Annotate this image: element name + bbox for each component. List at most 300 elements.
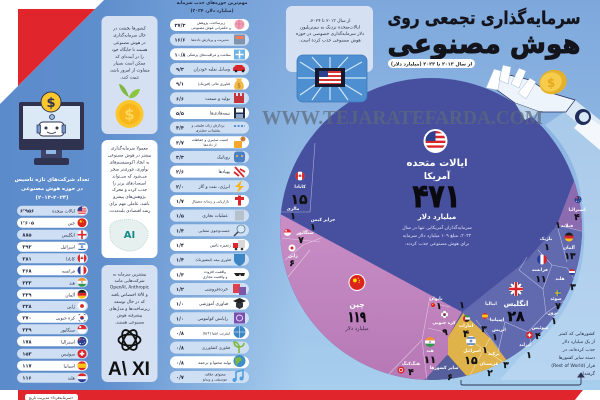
chart: voronoi investment by country — [270, 70, 600, 390]
text block: card three copy: OpenAI, Anthropic — [110, 284, 150, 290]
panel: country company counts — [17, 206, 88, 383]
arrow: rest of world bracket — [461, 373, 584, 385]
cell: Austria: اتریش — [492, 328, 506, 333]
text block: US investment note card: هوش مصنوعی جذب کرده است. — [299, 38, 361, 44]
row: cybersecurity: ۳/۷ — [176, 140, 184, 146]
row: energy oil and gas — [170, 180, 249, 193]
cell: France: فرانسه — [532, 268, 548, 273]
row: natural language processing: پشتیبانی مشتری — [196, 128, 220, 132]
cell: Singapore — [284, 229, 314, 246]
cell: Norway — [547, 311, 558, 327]
row: infrastructure and governance: زیرساخت، پژوهش — [197, 21, 225, 25]
row: United States: ۶٬۹۵۶ — [20, 209, 34, 215]
row: data management: ۱۶/۶ — [175, 38, 185, 44]
callout: United States: ۲۰۲۴، مبلغ ۱۰۹ میلیارد دلار سرمایه — [403, 233, 472, 239]
cell: Malaysia: ۱ — [290, 212, 296, 222]
callout: China — [344, 274, 369, 332]
subtitle pill: از سال ۲۰۱۳ تا ۲۰۲۴ (میلیارد دلار) — [391, 62, 472, 68]
cell: Germany: ۱۳ — [564, 252, 576, 262]
row: marketing and digital media — [170, 195, 249, 207]
region: Oceania — [557, 181, 582, 232]
row: retail: ۱/۲ — [176, 287, 184, 293]
heading: new company count — [15, 176, 89, 201]
row: quantum computing — [170, 312, 249, 324]
row: supply chain: زنجیره تامین — [210, 242, 231, 248]
cell: Cayman Islands: ۱ — [310, 223, 316, 233]
cell: Ireland: ۱ — [526, 351, 532, 361]
cell: Spain: اسپانیا — [490, 318, 505, 323]
icon: OpenAI knot logo — [118, 328, 140, 352]
row: Singapore: ۲۳۹ — [22, 327, 32, 333]
row: semantic search — [170, 224, 249, 236]
row: natural language processing: پردازش زبان طبیعی و — [190, 124, 225, 128]
row: semiconductors: نیمه‌هادی‌ها — [210, 112, 230, 116]
row: England: ۸۸۵ — [22, 233, 32, 239]
icon: robot hand holding coin — [486, 65, 600, 150]
text block: card one copy: را در آینده‌ای که — [115, 54, 144, 60]
callout: rest of world note: (Rest of World) قرار — [551, 363, 595, 369]
row: fintech — [170, 78, 249, 90]
row: Israel: اسرائیل — [61, 246, 75, 251]
cell: South Korea — [432, 311, 456, 338]
row: Australia: استرالیا — [61, 340, 75, 345]
callout: rest of world note — [551, 331, 596, 377]
cell: Netherlands: هلند — [555, 277, 565, 282]
callout: rest of world note: جذب کرده‌اند، در — [562, 347, 595, 353]
row: agritech: فناوری کشاورزی — [202, 345, 230, 350]
row: quantum computing: ۱/۰ — [176, 316, 184, 322]
logos: Anthropic and xAI: XI — [132, 359, 150, 380]
row: infrastructure and governance: و حکمرانی هوش مصنوعی — [191, 26, 231, 30]
cell: Finland: فنلاند — [561, 224, 573, 229]
region: Asia — [280, 214, 462, 380]
row: Canada: کانادا — [66, 256, 76, 262]
row: drones: پهپادها — [218, 170, 231, 175]
panel: card about leading AI companies — [102, 265, 158, 382]
row: supply chain: ۱/۴ — [176, 243, 184, 249]
row: India — [17, 277, 88, 287]
row: healthcare — [170, 48, 249, 60]
cell: United Kingdom: انگلیس — [504, 299, 528, 308]
row: content and translation — [170, 355, 249, 368]
cell: Singapore: سنگاپور — [295, 230, 314, 236]
text block: card three copy — [109, 272, 150, 326]
row: fintech: فناوری مالی (فین‌تک) — [198, 82, 230, 86]
row: content and translation: ۰/۸ — [176, 360, 184, 366]
region: Europe — [462, 181, 582, 360]
cell: France — [532, 254, 548, 285]
cell: Finland — [555, 221, 573, 231]
row: Canada: ۳۸۱ — [22, 256, 32, 262]
text block: card one copy: در هوش مصنوعی — [113, 41, 146, 46]
cell: Ireland: ایرلند — [519, 343, 531, 348]
row: Canada — [17, 253, 88, 263]
cell: Israel: ۱۵ — [464, 354, 478, 367]
text block: US investment note card: از سال ۲۰۱۳ تا ۲۰۲۴، — [310, 18, 350, 24]
row: healthcare: ۱۰/۸ — [175, 52, 185, 58]
row: Netherlands: ۱۱۶ — [22, 376, 32, 382]
row: business operations — [170, 210, 249, 222]
row: internet of things — [170, 326, 249, 339]
cell: France: ۱۱ — [536, 275, 546, 285]
cell: Austria: ۱ — [492, 333, 498, 343]
bottom red band: «سرمایه‌فردا» مدیریت تاریخ — [29, 395, 74, 400]
row: China — [17, 218, 88, 228]
callout: United States: میلیارد دلار — [417, 213, 456, 221]
row: internet of things: اینترنت اشیا (IoT) — [203, 332, 230, 336]
cell: South Korea: ۹ — [442, 328, 448, 338]
text block: card two copy: معمولا سرمایه‌گذاری — [111, 146, 148, 152]
callout: rest of world note: کشورهایی که کمتر — [558, 331, 596, 337]
cell: Germany: آلمان — [563, 245, 575, 251]
cell: Ireland — [519, 343, 532, 361]
subtitle pill — [388, 59, 475, 68]
cell: Israel: اسرائیل — [463, 349, 481, 354]
row: retail — [170, 283, 249, 295]
corner graphic: white and red triangles — [0, 0, 104, 104]
row: Spain — [17, 361, 88, 371]
row: autonomous vehicles — [170, 63, 249, 75]
cell: Malaysia: مالزی — [287, 207, 300, 212]
cell: Norway: نروژ — [547, 311, 558, 316]
callout: United States: ۴۷۱ — [412, 177, 460, 215]
row: United States: ایالات متحده — [52, 210, 75, 215]
row: marketing and digital media: بازاریابی و رسانه دیجیتال — [192, 200, 229, 204]
cell: Canada: کانادا — [294, 184, 306, 190]
cell: rest of world: سایر کشورها — [430, 365, 458, 371]
row: insurtech: ۱/۴ — [176, 258, 184, 264]
row: energy oil and gas: انرژی، نفت و گاز — [198, 184, 230, 190]
cell: Saudi Arabia — [479, 362, 499, 379]
row: AR and VR: ۱/۳ — [176, 272, 184, 278]
cell: Sweden: ۷ — [555, 302, 561, 312]
callout: United States: سرمایه‌گذاران آمریکایی تنها در سال — [402, 224, 472, 231]
row: Singapore: سنگاپور — [60, 327, 75, 333]
row: AR and VR: و واقعیت مجازی — [203, 275, 228, 279]
cell: rest of world — [430, 365, 458, 383]
row: Australia: ۱۷۸ — [22, 339, 32, 345]
cell: Switzerland: ۴ — [535, 332, 541, 342]
cell: rest of world: ۶ — [447, 373, 453, 383]
cell: Australia — [569, 196, 586, 223]
row: England: انگلیس — [62, 233, 75, 239]
cell: Sweden: سوئد — [550, 297, 562, 302]
row: France: فرانسه — [62, 269, 75, 274]
cell: Netherlands: ۳ — [570, 283, 576, 293]
row: fintech: $ — [237, 82, 241, 90]
row: manufacturing — [170, 92, 249, 104]
cell: UAE: امارات — [459, 324, 474, 329]
row: Australia — [17, 336, 88, 346]
icon: computer with robot and dollar coin — [19, 92, 84, 165]
row: creative media — [170, 370, 249, 383]
row: content and translation: تولید محتوا و ترجمه — [198, 360, 231, 365]
row: Netherlands — [17, 373, 88, 383]
row: edtech — [170, 298, 249, 310]
row: Switzerland: سوئیس — [61, 353, 75, 358]
row: supply chain — [170, 239, 249, 251]
text block: card three copy: مصنوعی هستند. — [115, 320, 144, 326]
cell: Australia: استرالیا — [569, 208, 586, 213]
row: energy oil and gas: ۲/۰ — [176, 184, 184, 190]
cell: Hong Kong: هنگ‌کنگ — [402, 361, 420, 367]
heading: key investment sectors: مهم‌ترین حوزه‌های جذب سرمایه — [177, 1, 248, 6]
row: manufacturing: تولید و صنعت — [205, 97, 231, 102]
text block: card one copy: کشورها بخشت در — [112, 26, 147, 32]
text block: card one copy: حال سرمایه‌گذاری — [113, 32, 146, 38]
cell: Saudi Arabia: عربستان — [479, 362, 499, 367]
cell: Belgium: بلژیک — [540, 236, 553, 242]
panel: card about ecosystem investment — [102, 140, 158, 258]
row: drones — [170, 166, 249, 178]
icon: robot hand holding coin: $ — [547, 76, 555, 90]
row: robotics: ۳/۳ — [176, 155, 184, 161]
text block: US investment note card — [286, 6, 373, 72]
cell: Germany — [563, 232, 576, 262]
cell: Finland: ۱ — [555, 221, 561, 231]
row: edtech: ۱/۰ — [176, 302, 184, 308]
text block: card one copy: تثبیت کنند. — [120, 74, 140, 80]
cell: South Korea: کره جنوبی — [432, 320, 456, 326]
row: fintech: ۹/۱ — [176, 82, 184, 88]
row: autonomous vehicles: وسایل نقلیه خودران — [193, 68, 230, 72]
cell: Spain: ۳ — [481, 325, 487, 335]
text block: card three copy: که در حال توسعه — [114, 299, 146, 305]
cell: Canada — [290, 172, 308, 208]
callout: United States — [402, 129, 472, 247]
cell: Spain — [481, 313, 505, 335]
callout: rest of world note: از یک میلیارد دلار — [561, 339, 595, 345]
row: India: هند — [69, 281, 76, 286]
text block: card two copy: جذب کرده و محرک — [112, 187, 147, 193]
heading: key investment sectors: (میلیارد دلار، ۲۰۲۴) — [190, 8, 234, 14]
row: insurtech: فناوری بیمه (اینشورتک) — [196, 258, 231, 262]
row: creative media: محتوای خلاقه، — [204, 372, 226, 376]
row: semantic search: ۱/۴ — [176, 228, 184, 234]
row: Germany — [17, 289, 88, 299]
row: Switzerland: ۱۵۳ — [22, 352, 32, 358]
row: retail: خرده‌فروشی — [205, 288, 228, 292]
row: edtech: فناوری آموزشی — [199, 301, 228, 307]
text block: card one copy — [109, 26, 150, 80]
row: infrastructure and governance: ۳۷/۳ — [175, 23, 185, 29]
cell: Saudi Arabia: ۲ — [487, 369, 493, 379]
region: Middle East — [448, 313, 508, 376]
row: Israel — [17, 242, 88, 252]
callout: China: ۱۱۹ — [348, 308, 366, 326]
cell: Taiwan: تایوان — [430, 297, 443, 302]
heading: new company count: (۲۰۱۳-۲۰۲۴) — [36, 195, 68, 201]
row: creative media: ۰/۷ — [176, 375, 184, 381]
cell: Hong Kong — [398, 361, 420, 378]
callout: rest of world note: گرفته‌اند. — [578, 370, 596, 377]
cell: Turkey — [482, 346, 509, 371]
row: United States — [17, 206, 88, 216]
row: South Korea: کره جنوبی — [56, 316, 76, 322]
row: semiconductors — [170, 107, 249, 119]
text block: card one copy: متفاوت از امروز باشد، — [109, 68, 150, 74]
text block: card three copy: بیشترین سرمایه به — [113, 272, 146, 278]
text block: card two copy: می‌شود که می‌تواند — [112, 174, 147, 180]
row: England — [17, 230, 88, 240]
panel: sector investment list — [170, 19, 249, 383]
row: France — [17, 265, 88, 275]
text block: US investment note card: ایالات‌متحده نزدیک به نیم‌تریلیون — [300, 24, 360, 30]
row: Japan: ۳۲۸ — [22, 304, 32, 310]
callout: United States: ایالات متحده — [406, 158, 468, 169]
text block: card one copy: هستند تا جایگاه خود — [112, 47, 148, 53]
row: autonomous vehicles: ۹/۳ — [176, 67, 184, 73]
row: natural language processing: ۴/۴ — [176, 126, 184, 132]
text block: card two copy: نوآوری، فوری‌تر منجر — [109, 166, 149, 172]
row: AR and VR — [170, 268, 249, 280]
row: healthcare: سلامت و مراقبت‌های پزشکی — [187, 53, 231, 57]
text block: card two copy — [108, 146, 151, 214]
row: South Korea — [17, 313, 88, 323]
row: agritech: ۰/۸ — [176, 346, 184, 352]
row: semiconductors: ۵/۵ — [176, 111, 184, 117]
row: cybersecurity — [170, 136, 249, 148]
cell: UAE: ۴ — [463, 329, 469, 340]
row: Netherlands: هلند — [68, 377, 76, 382]
logos: Anthropic and xAI: A\ — [108, 359, 128, 380]
watermark: WWW.TEJARATEFARDA.COM — [262, 108, 543, 129]
panel: card about strategic positioning — [102, 16, 158, 134]
text block: card three copy: پیشرفته هوش — [117, 314, 143, 318]
text block: card one copy: ممکن است بسیار — [113, 60, 145, 66]
callout: United States: آمریکا — [424, 170, 451, 182]
row: marketing and digital media: ۱/۷ — [176, 199, 184, 205]
cell: UAE — [459, 315, 474, 340]
row: agritech — [170, 342, 249, 354]
cell: Japan — [288, 244, 298, 269]
cell: Italy — [459, 301, 497, 311]
row: France: ۳۶۸ — [22, 268, 32, 274]
row: Spain: اسپانیا — [64, 365, 75, 370]
row: cybersecurity: امنیت سایبری و حفاظت — [192, 138, 228, 142]
row: Japan — [17, 301, 88, 311]
cell: Switzerland: سوئیس — [532, 326, 548, 331]
row: South Korea: ۲۷۰ — [22, 316, 32, 322]
heading: key investment sectors — [177, 1, 248, 14]
cell: Belgium — [540, 236, 553, 253]
row: drones: ۲/۶ — [176, 170, 184, 176]
row: manufacturing: ۶/۶ — [176, 96, 184, 102]
cell: Austria — [492, 328, 506, 343]
row: AR and VR: واقعیت افزوده — [204, 270, 226, 274]
cell: Singapore: ۷ — [298, 236, 304, 246]
row: Germany: ۳۲۹ — [22, 292, 32, 298]
cell: United Kingdom: ۲۸ — [507, 309, 525, 325]
bottom red band — [0, 390, 600, 400]
cell: Netherlands — [555, 269, 576, 293]
cell: Cayman Islands: جزایر کیمن — [311, 217, 335, 223]
cell: Japan: ژاپن — [288, 254, 298, 259]
cell: Turkey: ترکیه — [488, 351, 500, 357]
callout: United States: برای هوش مصنوعی جذب کردند. — [405, 241, 469, 247]
row: cybersecurity: از داده‌ها — [204, 143, 216, 147]
row: robotics — [170, 151, 249, 163]
row: creative media: موسیقی و ویدئو — [202, 378, 227, 382]
row: Switzerland — [17, 349, 88, 359]
callout: China: میلیارد دلار — [344, 326, 369, 332]
text block: card three copy: زیرساخت‌ها و مدل‌های — [109, 307, 150, 312]
cell: Canada: ۱۵ — [290, 192, 308, 208]
text block: card two copy: باشد، عاملی مهم برای — [109, 202, 150, 207]
text block: US investment note card: دلار سرمایه‌گذاری خصوصی در حوزه — [296, 30, 364, 37]
text block: card three copy: و xAI اختصاص یافته — [111, 292, 148, 298]
cell: Turkey: ۱ — [482, 346, 488, 356]
cell: Hong Kong: ۴ — [408, 368, 414, 378]
cell: Taiwan — [430, 297, 443, 312]
icon: coin with sprout: $ — [124, 106, 135, 124]
row: Singapore — [17, 324, 88, 334]
callout: rest of world note: دسته سایر کشورها — [559, 355, 595, 361]
text block: card two copy: به ایجاد اکوسیستم‌های — [110, 160, 149, 166]
logos: Anthropic and xAI — [108, 359, 150, 380]
callout: China: چین — [349, 300, 365, 309]
cell: Australia: ۴ — [574, 213, 580, 223]
row: business operations: عملیات تجاری — [202, 214, 228, 219]
row: data management: مدیریت و پردازش داده‌ها — [191, 38, 229, 42]
row: China: ۱٬۶۰۵ — [20, 221, 34, 227]
icon: computer with robot and dollar coin: $ — [46, 96, 56, 111]
row: natural language processing — [170, 122, 249, 134]
cell: Belgium: ۱ — [544, 243, 550, 253]
text block: card two copy: رشد اقتصادی بلندمدت. — [109, 209, 150, 214]
row: Japan: ژاپن — [67, 305, 75, 310]
row: robotics: روباتیک — [217, 154, 230, 160]
cell: Italy: ۱ — [459, 301, 465, 311]
row: China: چین — [68, 222, 75, 227]
row: Israel: ۳۹۲ — [22, 245, 32, 251]
cell: Norway: ۱ — [551, 317, 557, 327]
region: rest of world — [424, 355, 469, 380]
cell: Taiwan: ۱ — [436, 302, 442, 312]
cell: Japan: ۶ — [289, 259, 295, 269]
cell: Switzerland — [526, 326, 548, 342]
cell: India — [424, 337, 436, 366]
text block: card two copy: استعدادهای برتر را — [113, 182, 146, 186]
row: business operations: ۱/۵ — [176, 214, 184, 220]
cell: Sweden — [550, 290, 562, 312]
text block: card two copy: بیشتر در هوش مصنوعی — [108, 154, 151, 158]
icon: AI circuit brain: AI — [124, 230, 135, 241]
cell: United Kingdom — [504, 282, 528, 325]
row: insurtech — [170, 254, 249, 266]
row: Spain: ۱۱۷ — [22, 364, 32, 370]
icon: US flag on circuit chip — [297, 55, 367, 102]
cell: India: ۱۱ — [424, 355, 436, 366]
row: internet of things: ۰/۸ — [176, 331, 184, 337]
row: infrastructure and governance — [170, 19, 249, 31]
row: quantum computing: رایانش کوانتومی — [197, 316, 228, 322]
row: data management — [170, 34, 249, 46]
row: Germany: آلمان — [65, 292, 76, 298]
cell: India: هند — [426, 349, 434, 354]
heading: new company count: در حوزه هوش مصنوعی — [21, 186, 83, 192]
title: هوش مصنوعی — [388, 29, 580, 60]
row: semantic search: جست‌وجوی معنایی — [198, 228, 231, 233]
cell: Italy: ایتالیا — [485, 302, 497, 307]
cell borders — [278, 143, 585, 380]
title — [388, 7, 580, 60]
cell: Cayman Islands — [310, 217, 335, 233]
heading: new company count: تعداد شرکت‌های تازه تاسیس — [15, 176, 89, 183]
text block: card three copy: شرکت‌هایی مانند — [114, 278, 145, 284]
text block: card two copy: پژوهش‌های پیشرو — [112, 195, 147, 200]
row: India: ۳۳۳ — [22, 280, 32, 286]
